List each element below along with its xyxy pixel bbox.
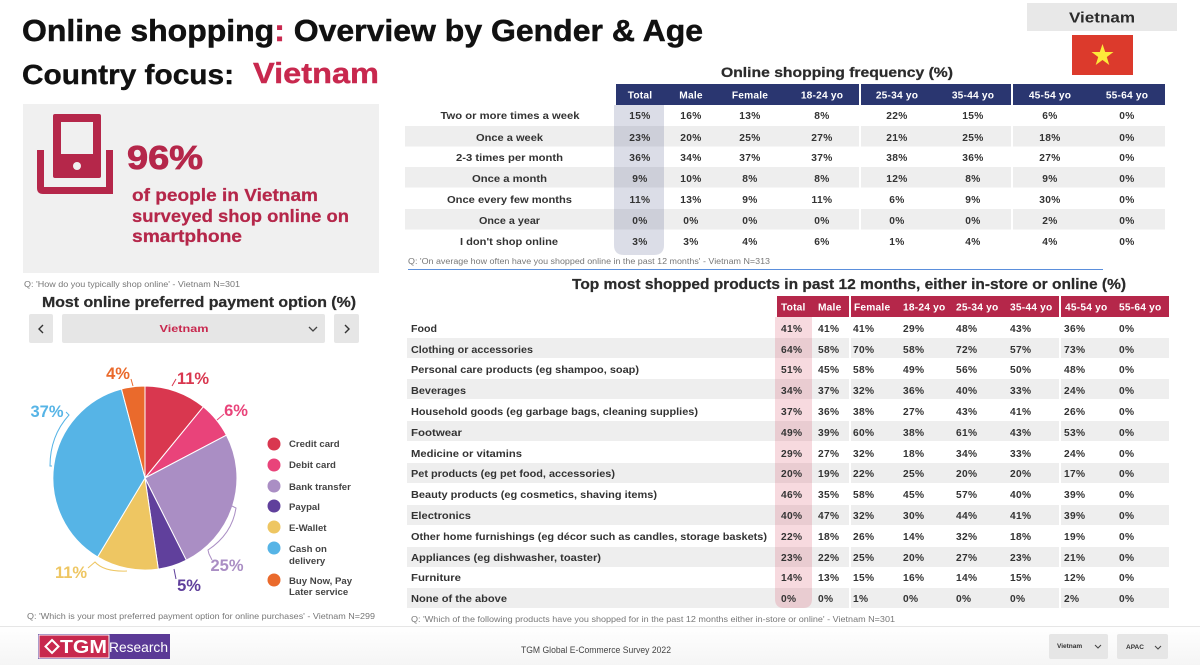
table values: 43% <box>1010 324 1031 335</box>
table values: 61% <box>956 428 977 439</box>
table values: 37% <box>781 407 802 418</box>
table values: 0% <box>1119 469 1134 480</box>
table values: 0% <box>1119 573 1134 584</box>
table values: 21% <box>1064 553 1085 564</box>
row labels <box>411 324 767 605</box>
table values: 0% <box>1119 490 1134 501</box>
table values: 0% <box>1119 386 1134 397</box>
table values: 34% <box>956 449 977 460</box>
highlight: total column <box>775 317 812 608</box>
table values: 6% <box>1042 111 1058 122</box>
table values: 8% <box>814 111 830 122</box>
legend: payment options: E-Wallet <box>289 523 327 534</box>
table values: 15% <box>629 111 651 122</box>
table values: 9% <box>965 195 981 206</box>
table values: 15% <box>1010 573 1031 584</box>
table values: 36% <box>629 153 651 164</box>
table values: 32% <box>853 386 874 397</box>
panel: smartphone stat <box>23 104 379 273</box>
table values: 0% <box>1010 594 1025 605</box>
table header: 25-34 yo <box>876 90 918 102</box>
table values: 8% <box>814 174 830 185</box>
row labels: Electronics <box>411 511 471 522</box>
table values: 2% <box>1064 594 1079 605</box>
table values: 14% <box>781 573 802 584</box>
table values: 0% <box>1119 324 1134 335</box>
footer <box>0 626 1200 665</box>
table values: 26% <box>853 532 874 543</box>
row labels: Beauty products (eg cosmetics, shaving items) <box>411 490 657 501</box>
table values: 9% <box>742 195 758 206</box>
subtitle: country focus <box>22 58 379 90</box>
legend: payment options: Credit card <box>289 439 340 450</box>
subtitle: country focus: Country focus: <box>22 59 234 90</box>
table values: 9% <box>632 174 648 185</box>
row labels: Once a week <box>476 133 543 144</box>
table values: 18% <box>1010 532 1031 543</box>
table values: 0% <box>1119 153 1135 164</box>
table values: 22% <box>781 532 802 543</box>
table values: 1% <box>853 594 868 605</box>
table values: 8% <box>742 174 758 185</box>
table values: 19% <box>1064 532 1085 543</box>
table values: 57% <box>1010 345 1031 356</box>
table values: 25% <box>853 553 874 564</box>
table values: 23% <box>629 133 651 144</box>
table values: 0% <box>1119 511 1134 522</box>
table values: 41% <box>1010 407 1031 418</box>
table values: 49% <box>903 365 924 376</box>
question note: payment: Q: 'Which is your most preferred payment option for online purchases' - Vietnam N=299 <box>27 611 375 621</box>
row labels: Beverages <box>411 386 466 397</box>
logo: TGM Research <box>38 634 170 659</box>
table values: 0% <box>903 594 918 605</box>
table values: 39% <box>1064 490 1085 501</box>
table values: 45% <box>818 365 839 376</box>
table values: 38% <box>903 428 924 439</box>
table values: 12% <box>886 174 908 185</box>
table values: 17% <box>1064 469 1085 480</box>
table values: 20% <box>781 469 802 480</box>
highlight: total column <box>614 105 664 255</box>
table header: 55-64 yo <box>1119 302 1161 314</box>
table values: 12% <box>1064 573 1085 584</box>
pie value labels: 11% <box>177 370 209 388</box>
table values: 38% <box>853 407 874 418</box>
row labels: Footwear <box>411 428 462 439</box>
table values: 45% <box>903 490 924 501</box>
icon: Vietnam flag <box>1072 35 1133 75</box>
table values: 27% <box>811 133 833 144</box>
table values: 21% <box>886 133 908 144</box>
question note: device: Q: 'How do you typically shop online' - Vietnam N=301 <box>24 279 240 289</box>
table values: 36% <box>1064 324 1085 335</box>
table values: 11% <box>812 195 832 206</box>
table header: Male <box>818 302 842 314</box>
table values: 60% <box>853 428 874 439</box>
table values: 41% <box>781 324 802 335</box>
table values: 15% <box>853 573 874 584</box>
legend: payment options: Bank transfer <box>289 482 351 493</box>
table values: 29% <box>903 324 924 335</box>
table values: 18% <box>903 449 924 460</box>
table values: 70% <box>853 345 874 356</box>
filter: country <box>1049 634 1108 659</box>
slice: debit card <box>145 407 226 478</box>
table values: 0% <box>1119 553 1134 564</box>
table values: 0% <box>814 216 830 227</box>
row labels: Food <box>411 324 437 335</box>
row labels: Once a month <box>472 174 547 185</box>
table values: 36% <box>818 407 839 418</box>
table values: 18% <box>1039 133 1061 144</box>
table values: 35% <box>818 490 839 501</box>
table header: 18-24 yo <box>903 302 945 314</box>
icon: smartphone in tray <box>37 114 113 194</box>
table values: 24% <box>1064 386 1085 397</box>
heading: products table: Top most shopped products in past 12 months, either in-store or online (%) <box>572 276 1126 293</box>
table values: 16% <box>680 111 702 122</box>
table values: 40% <box>1010 490 1031 501</box>
table values: 0% <box>1119 594 1134 605</box>
row labels: Other home furnishings (eg décor such as candles, storage baskets) <box>411 532 767 543</box>
table header: 45-54 yo <box>1029 90 1071 102</box>
table values: 0% <box>1119 428 1134 439</box>
row labels: None of the above <box>411 594 507 605</box>
table values: 15% <box>962 111 984 122</box>
table values: 10% <box>680 174 702 185</box>
survey name: TGM Global E-Commerce Survey 2022 <box>521 645 671 655</box>
table values: 14% <box>903 532 924 543</box>
leader lines <box>50 379 236 579</box>
table values: 4% <box>742 237 758 248</box>
table values: 32% <box>853 449 874 460</box>
table values: 43% <box>956 407 977 418</box>
table values: 34% <box>781 386 802 397</box>
table values: 13% <box>739 111 761 122</box>
slice: credit card <box>145 386 203 478</box>
stat description: smartphone <box>132 226 242 246</box>
table values: 46% <box>781 490 802 501</box>
table values: 37% <box>811 153 833 164</box>
heading: payment option: Most online preferred payment option (%) <box>42 294 356 311</box>
pie chart: payment options <box>30 365 248 595</box>
table values: 47% <box>818 511 839 522</box>
table values: 73% <box>1064 345 1085 356</box>
table values: 20% <box>956 469 977 480</box>
table: online shopping frequency <box>405 84 1165 255</box>
table values: 0% <box>956 594 971 605</box>
table values: 41% <box>818 324 839 335</box>
table values: 25% <box>739 133 761 144</box>
pie value labels: 5% <box>177 577 201 595</box>
table values: 27% <box>1039 153 1061 164</box>
logo: TGM Research: Research <box>109 639 168 655</box>
table values: 39% <box>818 428 839 439</box>
table values: 0% <box>1119 133 1135 144</box>
table header: 35-44 yo <box>952 90 994 102</box>
table values: 20% <box>680 133 702 144</box>
row labels: Household goods (eg garbage bags, cleaning supplies) <box>411 407 698 418</box>
table values: 4% <box>1042 237 1058 248</box>
table values: 27% <box>956 553 977 564</box>
table values: 0% <box>1119 449 1134 460</box>
heading: frequency table: Online shopping frequency (%) <box>721 64 953 80</box>
table values <box>629 111 1135 248</box>
subtitle: country focus: Vietnam <box>253 58 379 90</box>
table values: 30% <box>903 511 924 522</box>
table header: 55-64 yo <box>1106 90 1148 102</box>
table values: 0% <box>781 594 796 605</box>
country label: Vietnam <box>1069 10 1135 26</box>
table values: 34% <box>680 153 702 164</box>
table values: 0% <box>1119 111 1135 122</box>
table values: 3% <box>683 237 699 248</box>
row stripes <box>407 338 1169 608</box>
legend: payment options: Cash on <box>289 544 327 555</box>
table values: 25% <box>903 469 924 480</box>
row labels: Once every few months <box>447 195 572 206</box>
table values: 24% <box>1064 449 1085 460</box>
table values: 41% <box>1010 511 1031 522</box>
table values: 30% <box>1039 195 1061 206</box>
slice: bank transfer <box>145 435 237 560</box>
row labels: I don't shop online <box>460 237 558 248</box>
table values: 6% <box>814 237 830 248</box>
table values: 58% <box>853 365 874 376</box>
slice: paypal <box>145 478 186 569</box>
pie value labels: 6% <box>224 402 248 420</box>
slice: e-wallet <box>98 478 158 570</box>
country selector: Vietnam <box>160 323 208 335</box>
table values: 50% <box>1010 365 1031 376</box>
row labels <box>440 111 580 248</box>
table values: 0% <box>632 216 648 227</box>
table values: 58% <box>818 345 839 356</box>
pie value labels: 4% <box>106 365 130 383</box>
table values: 25% <box>962 133 984 144</box>
table values: 44% <box>956 511 977 522</box>
legend: payment options <box>268 438 353 598</box>
pie value labels: 11% <box>55 564 87 582</box>
table values: 0% <box>742 216 758 227</box>
table values: 0% <box>1119 407 1134 418</box>
table values: 58% <box>903 345 924 356</box>
table values: 49% <box>781 428 802 439</box>
table header: 45-54 yo <box>1065 302 1107 314</box>
table values: 33% <box>1010 386 1031 397</box>
table values: 64% <box>781 345 802 356</box>
legend: payment options: Later service <box>289 587 348 598</box>
table values: 22% <box>886 111 908 122</box>
table values: 8% <box>965 174 981 185</box>
table values: 6% <box>889 195 905 206</box>
pie value labels <box>30 365 248 595</box>
table values: 29% <box>781 449 802 460</box>
table values: 23% <box>1010 553 1031 564</box>
table values: 51% <box>781 365 802 376</box>
slice: cash on delivery <box>53 389 145 557</box>
pie value labels: 25% <box>210 557 244 575</box>
table values: 40% <box>956 386 977 397</box>
logo: TGM Research: TGM <box>60 637 107 657</box>
table values: 56% <box>956 365 977 376</box>
table values: 13% <box>680 195 702 206</box>
row labels: Once a year <box>479 216 540 227</box>
legend: payment options: delivery <box>289 556 326 567</box>
table values: 9% <box>1042 174 1058 185</box>
table values: 18% <box>818 532 839 543</box>
table values: 36% <box>903 386 924 397</box>
stat description <box>132 185 349 246</box>
filter: region: APAC <box>1126 644 1144 651</box>
row labels: Appliances (eg dishwasher, toaster) <box>411 553 601 564</box>
table values: 20% <box>903 553 924 564</box>
legend: payment options: Paypal <box>289 502 320 513</box>
table values: 22% <box>818 553 839 564</box>
question note: frequency: Q: 'On average how often have you shopped online in the past 12 months' - Vietnam N=313 <box>408 256 770 266</box>
table values: 23% <box>781 553 802 564</box>
table values: 0% <box>818 594 833 605</box>
table values: 37% <box>739 153 761 164</box>
table values: 0% <box>1119 174 1135 185</box>
table values: 11% <box>630 195 650 206</box>
table values: 0% <box>1119 237 1135 248</box>
table values: 0% <box>1119 345 1134 356</box>
pie value labels: 37% <box>30 403 64 421</box>
table values: 19% <box>818 469 839 480</box>
table values: 16% <box>903 573 924 584</box>
table values: 58% <box>853 490 874 501</box>
table values: 3% <box>632 237 648 248</box>
table values: 43% <box>1010 428 1031 439</box>
table values: 0% <box>683 216 699 227</box>
row labels: Furniture <box>411 573 461 584</box>
table values: 33% <box>1010 449 1031 460</box>
table values: 0% <box>1119 365 1134 376</box>
country label <box>1027 3 1177 31</box>
stat value: 96% <box>127 139 203 176</box>
stat description: surveyed shop online on <box>132 206 349 226</box>
row labels: 2-3 times per month <box>456 153 563 164</box>
table values: 1% <box>889 237 905 248</box>
table values: 40% <box>781 511 802 522</box>
table values: 22% <box>853 469 874 480</box>
table header: 35-44 yo <box>1010 302 1052 314</box>
table values: 20% <box>1010 469 1031 480</box>
table values: 0% <box>889 216 905 227</box>
row labels: Pet products (eg pet food, accessories) <box>411 469 615 480</box>
table values: 72% <box>956 345 977 356</box>
table values: 32% <box>956 532 977 543</box>
table header: Female <box>854 302 890 314</box>
table values: 38% <box>886 153 908 164</box>
table header: Female <box>732 90 768 102</box>
table header <box>777 296 1169 317</box>
table values: 0% <box>1119 532 1134 543</box>
table values: 32% <box>853 511 874 522</box>
filter: country: Vietnam <box>1057 643 1082 650</box>
table values: 13% <box>818 573 839 584</box>
table values: 48% <box>956 324 977 335</box>
table values: 0% <box>1119 216 1135 227</box>
table values: 2% <box>1042 216 1058 227</box>
table values: 27% <box>903 407 924 418</box>
table header: Total <box>781 302 806 314</box>
table header: 25-34 yo <box>956 302 998 314</box>
row labels: Personal care products (eg shampoo, soap) <box>411 365 639 376</box>
question note: products: Q: 'Which of the following products have you shopped for in the past 12 months either in-store or online' - Vietnam N=301 <box>411 614 895 624</box>
filter: region <box>1117 634 1168 659</box>
row labels: Clothing or accessories <box>411 345 533 356</box>
row labels: Medicine or vitamins <box>411 449 522 460</box>
legend: payment options: Debit card <box>289 460 336 471</box>
legend: payment options: Buy Now, Pay <box>289 576 353 587</box>
table header <box>616 84 1165 105</box>
table values: 4% <box>965 237 981 248</box>
table values: 36% <box>962 153 984 164</box>
table values: 0% <box>1119 195 1135 206</box>
table values: 27% <box>818 449 839 460</box>
title: Online shopping: Overview by Gender & Age <box>22 13 703 48</box>
table values: 39% <box>1064 511 1085 522</box>
table values: 26% <box>1064 407 1085 418</box>
table: most shopped products <box>407 296 1169 608</box>
table header: Total <box>628 90 652 102</box>
table header: 18-24 yo <box>801 90 843 102</box>
stat description: of people in Vietnam <box>132 185 318 205</box>
table values: 0% <box>965 216 981 227</box>
table values: 37% <box>818 386 839 397</box>
slice: buy now pay later <box>122 386 145 478</box>
row labels: Two or more times a week <box>440 111 580 122</box>
table values: 14% <box>956 573 977 584</box>
row stripes <box>405 126 1165 230</box>
table values: 48% <box>1064 365 1085 376</box>
country selector <box>29 314 359 343</box>
table values: 41% <box>853 324 874 335</box>
table header: Male <box>679 90 703 102</box>
table values <box>781 324 1134 605</box>
table values: 53% <box>1064 428 1085 439</box>
table values: 57% <box>956 490 977 501</box>
